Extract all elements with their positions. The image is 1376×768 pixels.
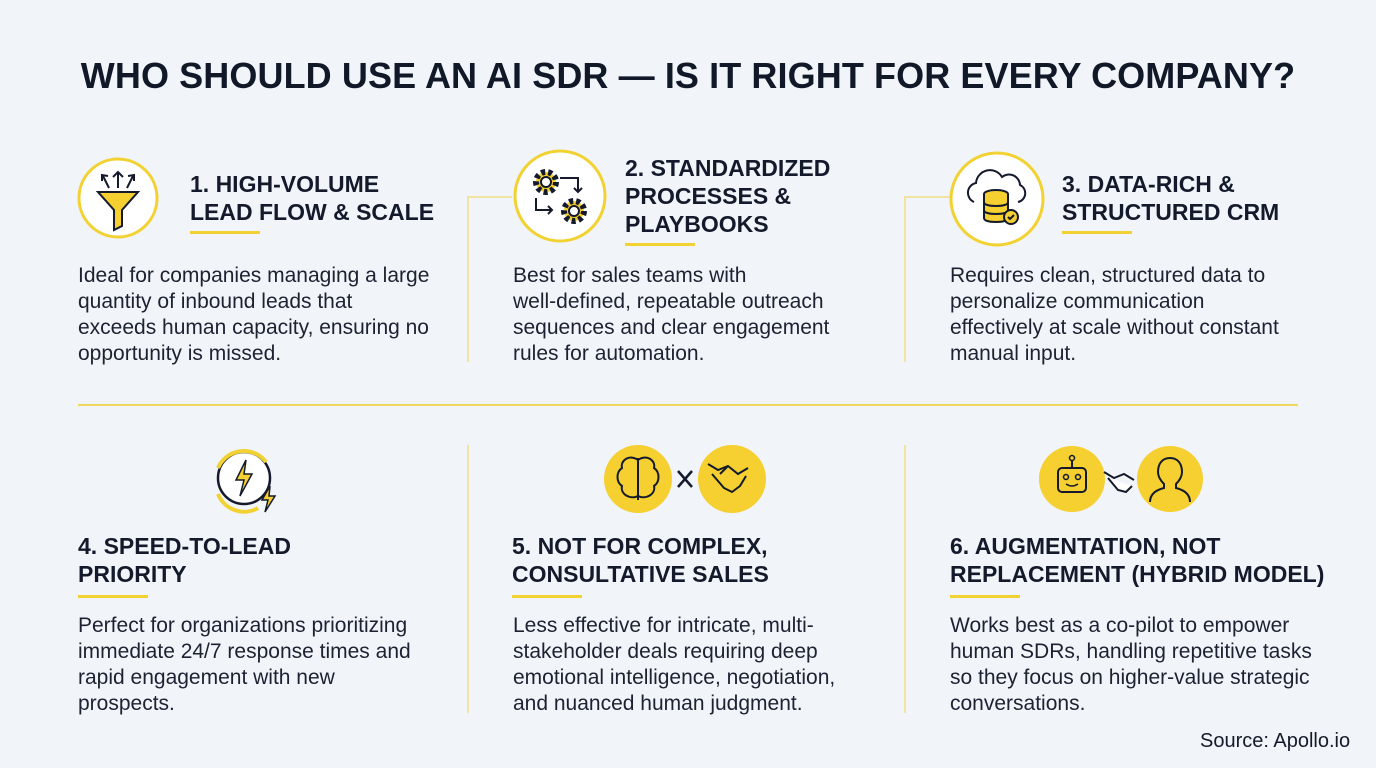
heading: 3. DATA-RICH &: [1062, 171, 1235, 197]
title: WHO SHOULD USE AN AI SDR — IS IT RIGHT FOR EVERY COMPANY?: [81, 55, 1295, 96]
source: Source: Apollo.io: [1200, 730, 1350, 752]
body text: quantity of inbound leads that: [78, 290, 352, 313]
body text: effectively at scale without constant: [950, 316, 1279, 339]
icon: gears: [514, 150, 606, 242]
body text: so they focus on higher-value strategic: [950, 666, 1310, 689]
body text: [78, 264, 429, 365]
panel: 2 standardized: [513, 150, 830, 365]
body text: human SDRs, handling repetitive tasks: [950, 640, 1312, 663]
heading: 2. STANDARDIZED: [625, 155, 830, 181]
body text: [950, 264, 1279, 365]
body text: Less effective for intricate, multi-: [513, 614, 814, 637]
body text: [78, 614, 411, 715]
body text: Perfect for organizations prioritizing: [78, 614, 407, 637]
body text: rapid engagement with new: [78, 666, 335, 689]
heading: LEAD FLOW & SCALE: [190, 199, 434, 225]
heading: STRUCTURED CRM: [1062, 199, 1279, 225]
heading: PROCESSES &: [625, 183, 791, 209]
body text: prospects.: [78, 692, 175, 715]
panel: 6 augmentation: [950, 446, 1324, 715]
heading: REPLACEMENT (HYBRID MODEL): [950, 561, 1324, 587]
heading: [512, 533, 769, 587]
heading: 4. SPEED-TO-LEAD: [78, 533, 291, 559]
icon: cloud database: [950, 152, 1044, 246]
panel: 5 not for complex: [512, 445, 835, 715]
heading: 5. NOT FOR COMPLEX,: [512, 533, 768, 559]
body text: [950, 614, 1312, 715]
body text: stakeholder deals requiring deep: [513, 640, 818, 663]
body text: Ideal for companies managing a large: [78, 264, 429, 287]
body text: immediate 24/7 response times and: [78, 640, 411, 663]
body text: personalize communication: [950, 290, 1204, 313]
panel: 1 high volume: [78, 158, 434, 365]
body text: [513, 264, 830, 365]
body text: sequences and clear engagement: [513, 316, 829, 339]
heading: 6. AUGMENTATION, NOT: [950, 533, 1220, 559]
icon: funnel: [78, 158, 158, 238]
heading: [950, 533, 1324, 587]
body text: emotional intelligence, negotiation,: [513, 666, 835, 689]
panel: 3 data rich: [950, 152, 1279, 365]
heading: [625, 155, 830, 237]
heading: [1062, 171, 1279, 225]
heading: CONSULTATIVE SALES: [512, 561, 769, 587]
heading: [190, 171, 434, 225]
heading: 1. HIGH-VOLUME: [190, 171, 379, 197]
body text: exceeds human capacity, ensuring no: [78, 316, 429, 339]
heading: PRIORITY: [78, 561, 187, 587]
icon: robot handshake human: [1039, 446, 1203, 512]
icon: clock lightning: [216, 449, 276, 514]
body text: opportunity is missed.: [78, 342, 281, 365]
body text: Best for sales teams with: [513, 264, 746, 287]
body text: [513, 614, 835, 715]
body text: Requires clean, structured data to: [950, 264, 1265, 287]
heading: [78, 533, 291, 587]
body text: manual input.: [950, 342, 1076, 365]
body text: rules for automation.: [513, 342, 704, 365]
body text: well-defined, repeatable outreach: [513, 290, 824, 313]
body text: conversations.: [950, 692, 1085, 715]
heading: PLAYBOOKS: [625, 211, 769, 237]
panel: 4 speed to lead: [78, 449, 411, 715]
icon: brain x handshake: [604, 445, 766, 513]
body text: Works best as a co-pilot to empower: [950, 614, 1289, 637]
body text: and nuanced human judgment.: [513, 692, 803, 715]
